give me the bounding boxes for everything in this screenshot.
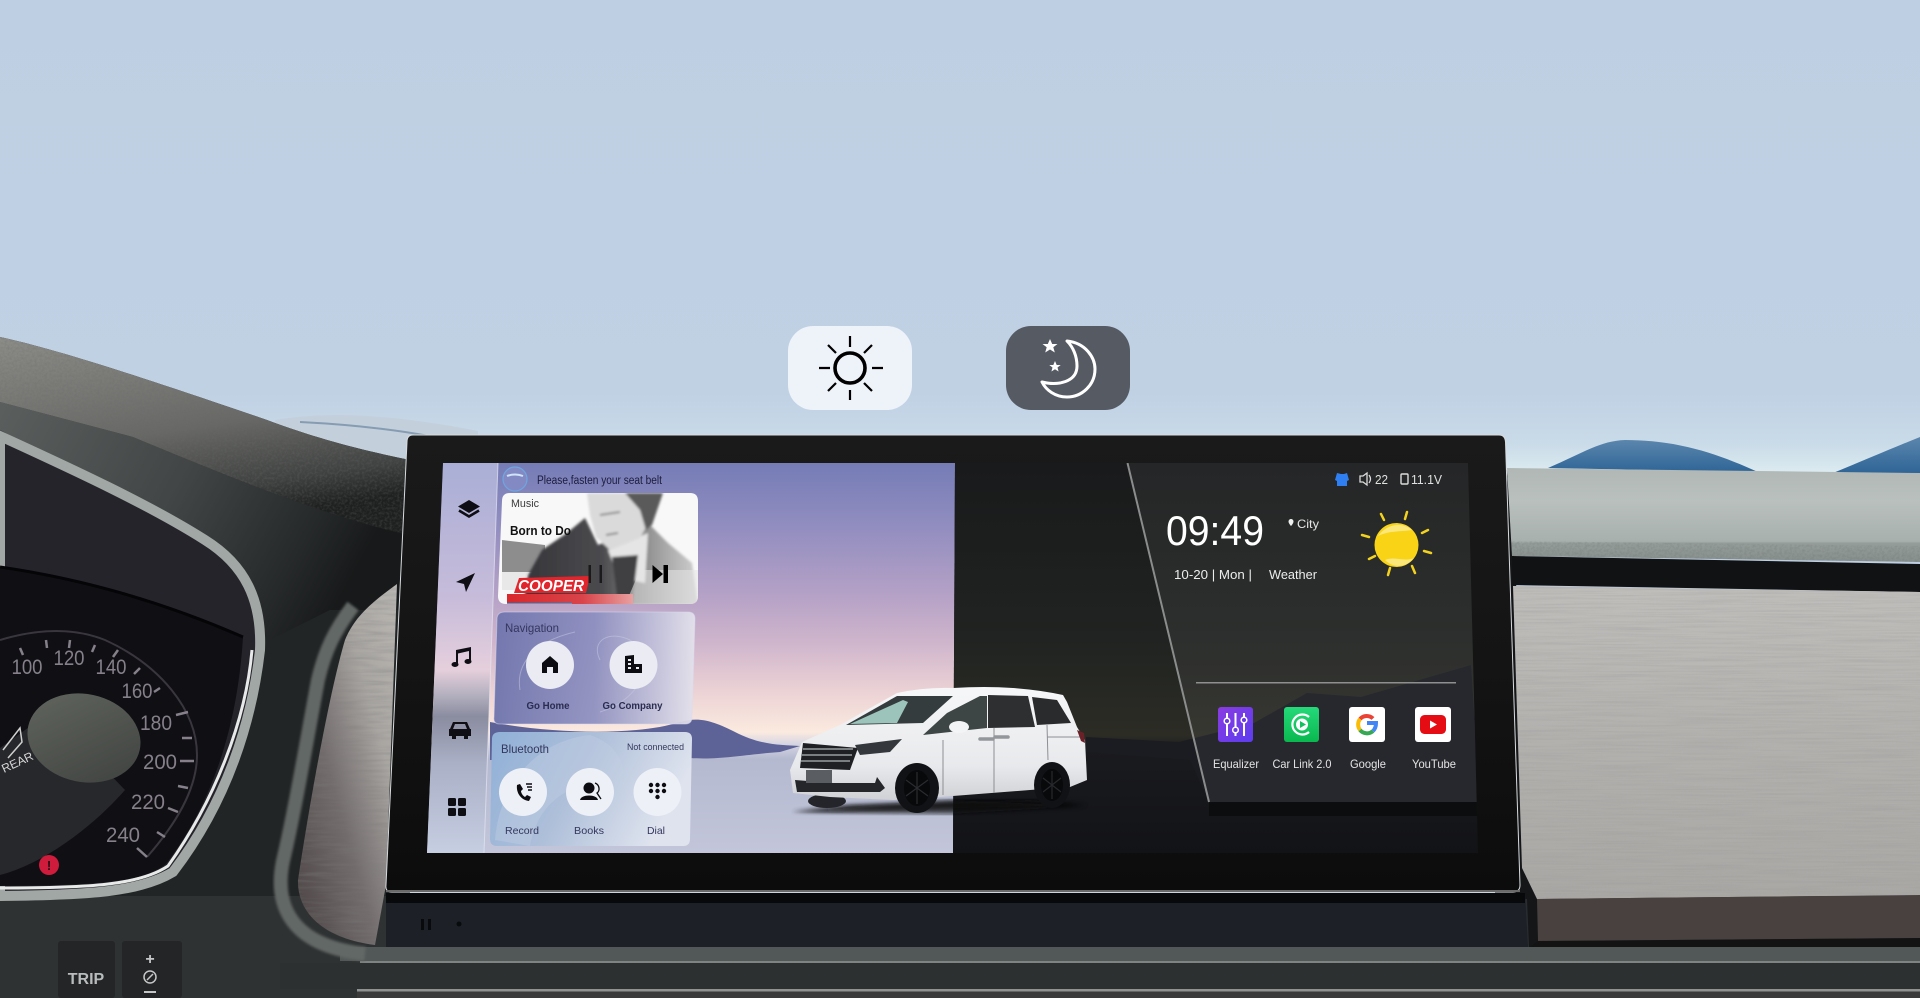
dark hills (1086, 665, 1475, 742)
headlight (855, 739, 902, 755)
wood trim lower edge (1537, 895, 1920, 941)
panel: navigation card (494, 612, 695, 724)
volume value: 22 (1375, 472, 1388, 487)
app: google: Google (1350, 757, 1386, 771)
icon: voice assistant (503, 467, 527, 491)
mode toggle: light (788, 326, 912, 410)
weather label: Weather (1269, 568, 1317, 582)
album art red strip (507, 594, 633, 605)
icon: music note (452, 647, 472, 667)
tail light (1077, 730, 1085, 743)
dial button (634, 768, 682, 837)
speedometer numbers: 180 (140, 712, 172, 735)
icon: moon and stars (1042, 339, 1095, 397)
speedometer ticks (20, 640, 194, 857)
panel: light mode screen (420, 463, 960, 855)
panel: dark mode screen (950, 463, 1480, 855)
adjust button: + (145, 951, 155, 968)
hood above gauge (0, 402, 410, 640)
backing next to display (1495, 470, 1545, 947)
windshield (846, 696, 953, 725)
date: 10-20 | Mon | (1174, 568, 1252, 582)
warning light: ! (47, 858, 51, 873)
app: equalizer (1213, 707, 1259, 771)
app: equalizer: Equalizer (1213, 757, 1259, 771)
dashboard left section (0, 330, 410, 998)
console lower trim (357, 989, 1920, 992)
panel: music card (498, 493, 698, 605)
panel: bluetooth card (490, 732, 692, 846)
pause control (588, 565, 602, 583)
mirror (949, 721, 969, 733)
speedometer numbers: 200 (143, 751, 177, 774)
stalk label (0, 728, 36, 776)
app: youtube: YouTube (1412, 757, 1456, 771)
speedometer arc (0, 631, 197, 857)
front wheel (895, 763, 939, 813)
gauge cluster housing (0, 436, 260, 896)
divider (1196, 682, 1456, 684)
icon: car (449, 722, 471, 739)
van body (790, 687, 1087, 800)
display base (386, 893, 1528, 947)
base indicator dot (456, 922, 462, 926)
card heading: Navigation (505, 621, 559, 635)
seat belt prompt: Please,fasten your seat belt (537, 475, 663, 487)
head unit display (386, 435, 1520, 892)
bezel (386, 435, 1520, 892)
app: car link (1272, 707, 1332, 771)
next control (652, 565, 668, 583)
album art person (523, 493, 698, 605)
lower console (0, 896, 1920, 998)
speedometer numbers (12, 647, 177, 847)
speedometer numbers: 100 (12, 656, 42, 679)
sky background (0, 0, 1920, 480)
record button (499, 768, 547, 837)
books button: Books (574, 825, 604, 837)
location: City (1297, 517, 1319, 531)
map lines (519, 632, 644, 712)
upper dash pad (1507, 468, 1920, 562)
warning light (39, 855, 59, 875)
wiper stalk (0, 712, 125, 875)
door seams (943, 725, 1080, 795)
card backdrop swirl (495, 736, 596, 846)
card label: Music (511, 498, 539, 510)
album art logo: COOPER (518, 578, 584, 595)
books button (566, 768, 614, 837)
icon: battery (1401, 474, 1408, 484)
app: google (1349, 707, 1386, 771)
hills (490, 720, 800, 760)
van shadow (792, 800, 1087, 812)
go home button (526, 641, 574, 712)
van illustration (790, 687, 1087, 814)
trip button (58, 941, 115, 998)
speedometer numbers: 140 (96, 656, 126, 679)
surround highlight (281, 606, 365, 954)
leather top pad (0, 337, 410, 535)
speedometer numbers: 160 (122, 680, 152, 703)
rear wheel (1034, 762, 1070, 808)
icon: layers (458, 500, 480, 516)
door handles (980, 737, 1008, 739)
song title: Born to Do (510, 523, 571, 538)
stalk label: REAR (0, 749, 36, 776)
clock: 09:49 (1166, 507, 1264, 554)
dashboard right section (1495, 468, 1920, 947)
speedometer numbers: 240 (106, 824, 140, 847)
stalk knob (19, 683, 149, 793)
trip button: TRIP (68, 971, 105, 988)
front grille (800, 743, 858, 770)
base buttons (421, 919, 431, 930)
status bar (1335, 472, 1442, 487)
black gap below pad (1512, 556, 1920, 592)
go company button (602, 641, 663, 712)
adjust button (122, 941, 182, 998)
go company button: Go Company (602, 700, 663, 712)
speedometer numbers: 120 (54, 647, 84, 670)
speedometer numbers: 220 (131, 791, 165, 814)
record button: Record (505, 825, 539, 837)
icon: speaker (1360, 473, 1367, 485)
connection status: Not connected (627, 742, 684, 753)
nav strip (427, 463, 498, 853)
album art light fade (625, 570, 698, 605)
icon: shirt (1335, 473, 1349, 486)
voltage value: 11.1V (1411, 472, 1442, 487)
distant mountains (275, 415, 1920, 480)
icon: sun (819, 336, 883, 400)
location (1288, 517, 1319, 531)
card heading: Bluetooth (501, 742, 549, 756)
lower grille (795, 777, 885, 792)
icon: sun weather (1362, 512, 1431, 575)
mode toggle: dark (1006, 326, 1130, 410)
app: youtube (1412, 707, 1456, 771)
wood trim left (298, 584, 397, 945)
album art backdrop (502, 540, 545, 572)
wood trim panel (1513, 586, 1920, 899)
go home button: Go Home (526, 700, 570, 712)
far front wheel (808, 794, 846, 808)
icon: apps grid (448, 798, 466, 816)
dash base (0, 337, 410, 896)
app: car link: Car Link 2.0 (1272, 757, 1332, 771)
dial button: Dial (647, 825, 665, 837)
console upper rail (340, 947, 1920, 961)
side windows (923, 695, 1071, 735)
icon: navigation arrow (456, 573, 475, 592)
translucent pane (1127, 463, 1479, 802)
